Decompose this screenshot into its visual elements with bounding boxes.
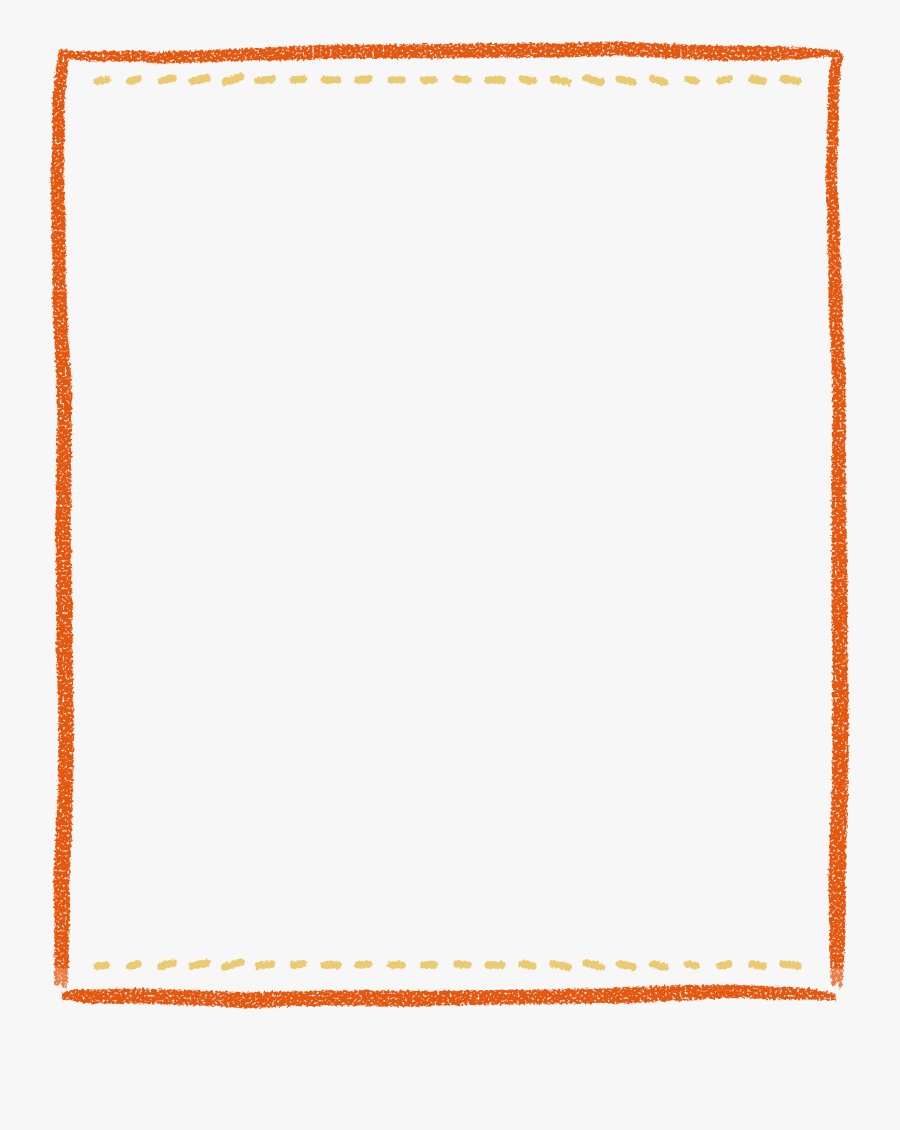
left edge [51, 50, 73, 968]
orange crayon border [51, 42, 848, 1008]
bottom edge [62, 985, 835, 1008]
left edge streaks [55, 966, 68, 988]
top edge [62, 42, 838, 63]
bottom row of yellow dashes [97, 962, 798, 967]
top row of yellow dashes [97, 77, 798, 82]
right edge [826, 50, 848, 968]
right edge streaks [831, 966, 843, 988]
